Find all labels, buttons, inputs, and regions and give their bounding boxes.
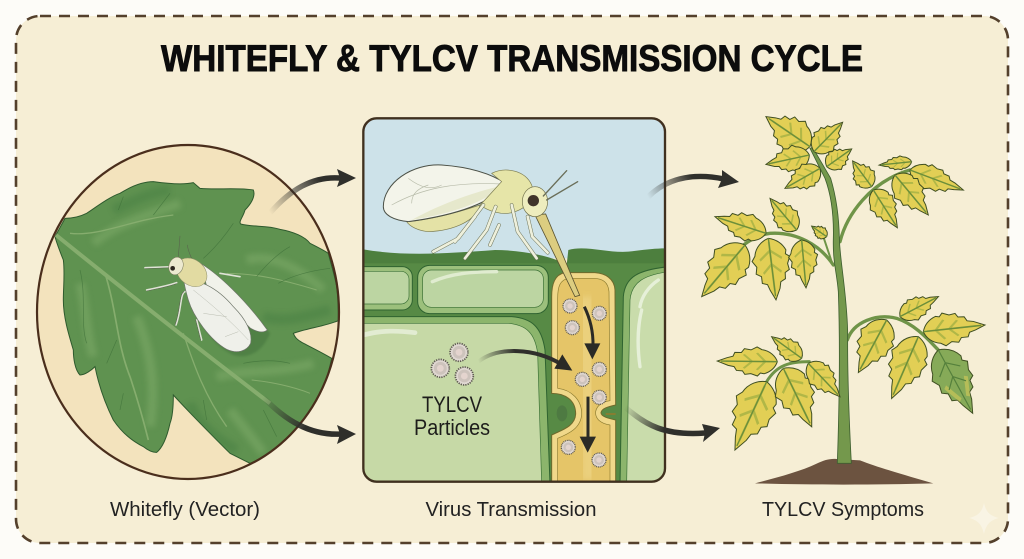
phloem cell	[552, 273, 616, 483]
lower large cell	[362, 317, 550, 483]
particles label: TYLCV	[422, 392, 482, 417]
arrow: transmission to symptoms lower	[625, 407, 720, 442]
insect shadow	[214, 327, 270, 356]
arrow: transmission to symptoms upper	[648, 170, 739, 197]
lower right leaves	[842, 286, 990, 423]
whitefly	[145, 236, 267, 352]
soil	[755, 459, 933, 485]
icon: sparkle	[969, 503, 999, 534]
right cell	[620, 267, 668, 483]
tomato plant with symptoms	[686, 101, 990, 485]
panel: virus transmission	[342, 118, 668, 483]
arrow: downward flow two	[580, 397, 596, 453]
particles label	[414, 392, 490, 440]
arrow: particles into phloem	[478, 351, 572, 371]
caption: whitefly: Whitefly (Vector)	[110, 499, 260, 521]
stems	[733, 170, 938, 382]
title: WHITEFLY & TYLCV TRANSMISSION CYCLE	[161, 38, 863, 79]
upper middle cell	[418, 265, 548, 314]
arrow: leaf to transmission	[270, 169, 356, 213]
leaf	[55, 182, 338, 463]
leaf epidermis	[364, 248, 664, 264]
upper left cell	[364, 266, 413, 310]
caption: transmission: Virus Transmission	[426, 499, 596, 521]
panel: whitefly on leaf	[37, 145, 339, 479]
sky	[363, 118, 665, 258]
right upper leaves	[843, 154, 968, 235]
arrow: leaf to lower transmission	[263, 397, 356, 444]
virus particles	[431, 299, 606, 467]
chloroplast	[557, 405, 567, 421]
whitefly feeding	[383, 165, 580, 297]
leaf veins	[56, 215, 317, 440]
caption: symptoms: TYLCV Symptoms	[762, 499, 924, 521]
left upper leaves	[686, 190, 830, 310]
arrow: downward flow one	[584, 307, 600, 359]
lower left leaves	[715, 328, 850, 459]
particles label: Particles	[414, 415, 490, 440]
top leaf cluster	[756, 101, 858, 199]
